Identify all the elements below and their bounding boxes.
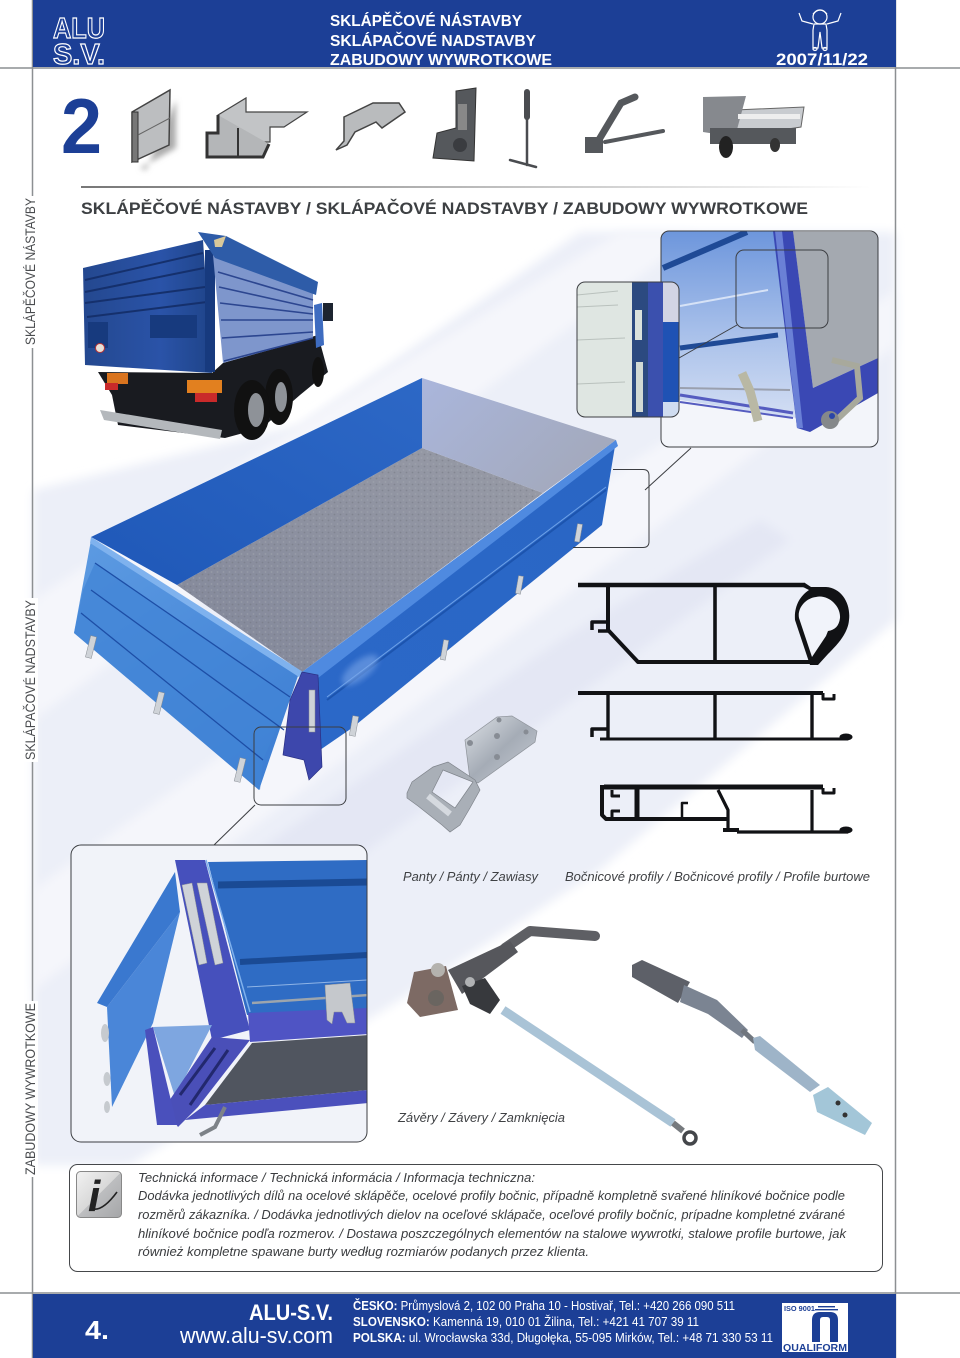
- header rule: [81, 186, 871, 188]
- technical information text: również kompletne spawane burty według rozmiarów podanych przez klienta.: [138, 1244, 589, 1259]
- rear panel: [83, 240, 212, 373]
- wall: [208, 860, 368, 1015]
- header titles: [330, 12, 552, 69]
- step: [100, 410, 222, 439]
- sidebar labels: ZABUDOWY WYWROTKOWE: [23, 1003, 38, 1175]
- section title: SKLÁPĚČOVÉ NÁSTAVBY / SKLÁPAČOVÉ NADSTAVBY / ZABUDOWY WYWROTKOWE: [81, 199, 808, 218]
- open board: [107, 912, 180, 1107]
- sidebar labels: SKLÁPAČOVÉ NADSTAVBY: [23, 600, 38, 760]
- photo: closing lever latch: [407, 931, 696, 1144]
- photo: hook latch: [632, 960, 872, 1135]
- information box: [70, 1164, 882, 1272]
- end section: [153, 1025, 212, 1097]
- logo: ALU S.V.: ALU: [53, 13, 105, 45]
- side panel: [213, 255, 313, 363]
- header titles: SKLÁPAČOVÉ NADSTAVBY: [330, 32, 537, 50]
- callout frames with leader lines: [213, 448, 691, 846]
- tarp: [198, 232, 318, 295]
- technical information text: hliníkové bočnice podľa rozmerov. / Dostawa poszczególnych elementów na stalowe wywrotki, stalowe profile burtowe, jak: [138, 1226, 847, 1241]
- profile 3: [602, 785, 852, 834]
- company name and web: [179, 1300, 333, 1348]
- technical information text: Dodávka jednotlivých dílů na ocelové sklápěče, ocelové profily bočnic, případně kompletně svařené hliníkové bočnice podle: [138, 1188, 845, 1203]
- company name and web: ALU-S.V.: [249, 1300, 333, 1325]
- inner left wall: [91, 378, 422, 585]
- sidebar labels: [22, 196, 38, 1177]
- header titles: SKLÁPĚČOVÉ NÁSTAVBY: [330, 12, 523, 30]
- clasp: [325, 983, 355, 1024]
- footer band: [33, 1294, 896, 1358]
- folded front board: [74, 540, 299, 790]
- technical information text: rozměrů zákazníka. / Dodávka jednotlivých dielov na oceľové sklápače, oceľové profily bočníc, prípadne kompletné zvárané: [138, 1207, 845, 1222]
- header titles: ZABUDOWY WYWROTKOWE: [330, 52, 552, 69]
- ISO 9001 Qualiform badge: QUALIFORM: [783, 1343, 847, 1354]
- aluminium side profile cross-sections: [578, 583, 852, 834]
- logo: ALU S.V.: S.V.: [53, 39, 105, 71]
- background: ghosted truck-bed watermark: [33, 232, 896, 1165]
- caption: latches: Závěry / Závery / Zamknięcia: [397, 1110, 565, 1125]
- thumbnail: small tipper truck: [703, 96, 804, 158]
- post: [175, 860, 250, 1040]
- thumbnail: profile 3: [336, 103, 405, 150]
- technical information text: [138, 1170, 847, 1259]
- icon: info: [76, 1172, 122, 1221]
- corner post: [283, 672, 322, 780]
- photo: open side board detail: [71, 845, 368, 1142]
- ISO 9001 Qualiform badge: [782, 1303, 848, 1354]
- page number: 4.: [85, 1315, 109, 1345]
- contact lines: SLOVENSKO: Kamenná 19, 010 01 Žilina, Tel.: +421 41 707 39 11: [353, 1314, 699, 1329]
- technical information text: Technická informace / Technická informácia / Informacja techniczna:: [138, 1170, 535, 1185]
- contact lines: POLSKA: ul. Wrocławska 33d, Długołęka, 55-095 Mirków, Tel.: +48 71 330 53 11: [353, 1331, 773, 1345]
- company name and web: www.alu-sv.com: [179, 1323, 333, 1348]
- right outer wall: [318, 440, 616, 750]
- photo: tall hinge detail: [661, 231, 878, 447]
- profile 2: [578, 693, 852, 740]
- contact lines: [353, 1298, 773, 1345]
- floor: [205, 1035, 368, 1105]
- thumbnail: profile 1: [132, 90, 176, 170]
- thumbnail: lever: [585, 97, 663, 153]
- thumbnail: latch rod: [510, 92, 536, 167]
- profile 1 with rounded bulb: [578, 583, 849, 665]
- chassis and undercarriage: [98, 335, 328, 438]
- thumbnail: profile 2: [207, 98, 307, 157]
- inner back wall: [422, 378, 616, 493]
- logo: ALU S.V.: [53, 13, 105, 71]
- header band: [33, 0, 896, 71]
- thumbnail: hinge: [433, 88, 476, 161]
- photo: profile end detail: [577, 282, 679, 417]
- date: 2007/11/22: [776, 51, 868, 69]
- lights: [107, 373, 128, 384]
- wheels: [312, 357, 324, 387]
- ISO 9001 Qualiform badge: ISO 9001: [784, 1306, 815, 1313]
- photo: tipper truck, rear view: [83, 232, 333, 440]
- mascot icon: [799, 10, 841, 50]
- sidebar labels: SKLÁPĚČOVÉ NÁSTAVBY: [23, 198, 38, 345]
- rail: [248, 1008, 368, 1042]
- caption: hinges: Panty / Pánty / Zawiasy: [403, 869, 539, 884]
- photo: hinge plate: [407, 716, 537, 832]
- thumbnail row: [132, 88, 804, 170]
- contact lines: ČESKO: Průmyslová 2, 102 00 Praha 10 - Hostivař, Tel.: +420 266 090 511: [353, 1298, 735, 1313]
- photo: tipper body with side boards: [74, 378, 618, 790]
- icon: info: i: [88, 1172, 101, 1221]
- chapter number: 2: [61, 82, 102, 170]
- floor: [177, 448, 543, 672]
- caption: side profiles: Bočnicové profily / Bočnicové profily / Profile burtowe: [565, 869, 870, 884]
- cab and mirror: [314, 303, 324, 348]
